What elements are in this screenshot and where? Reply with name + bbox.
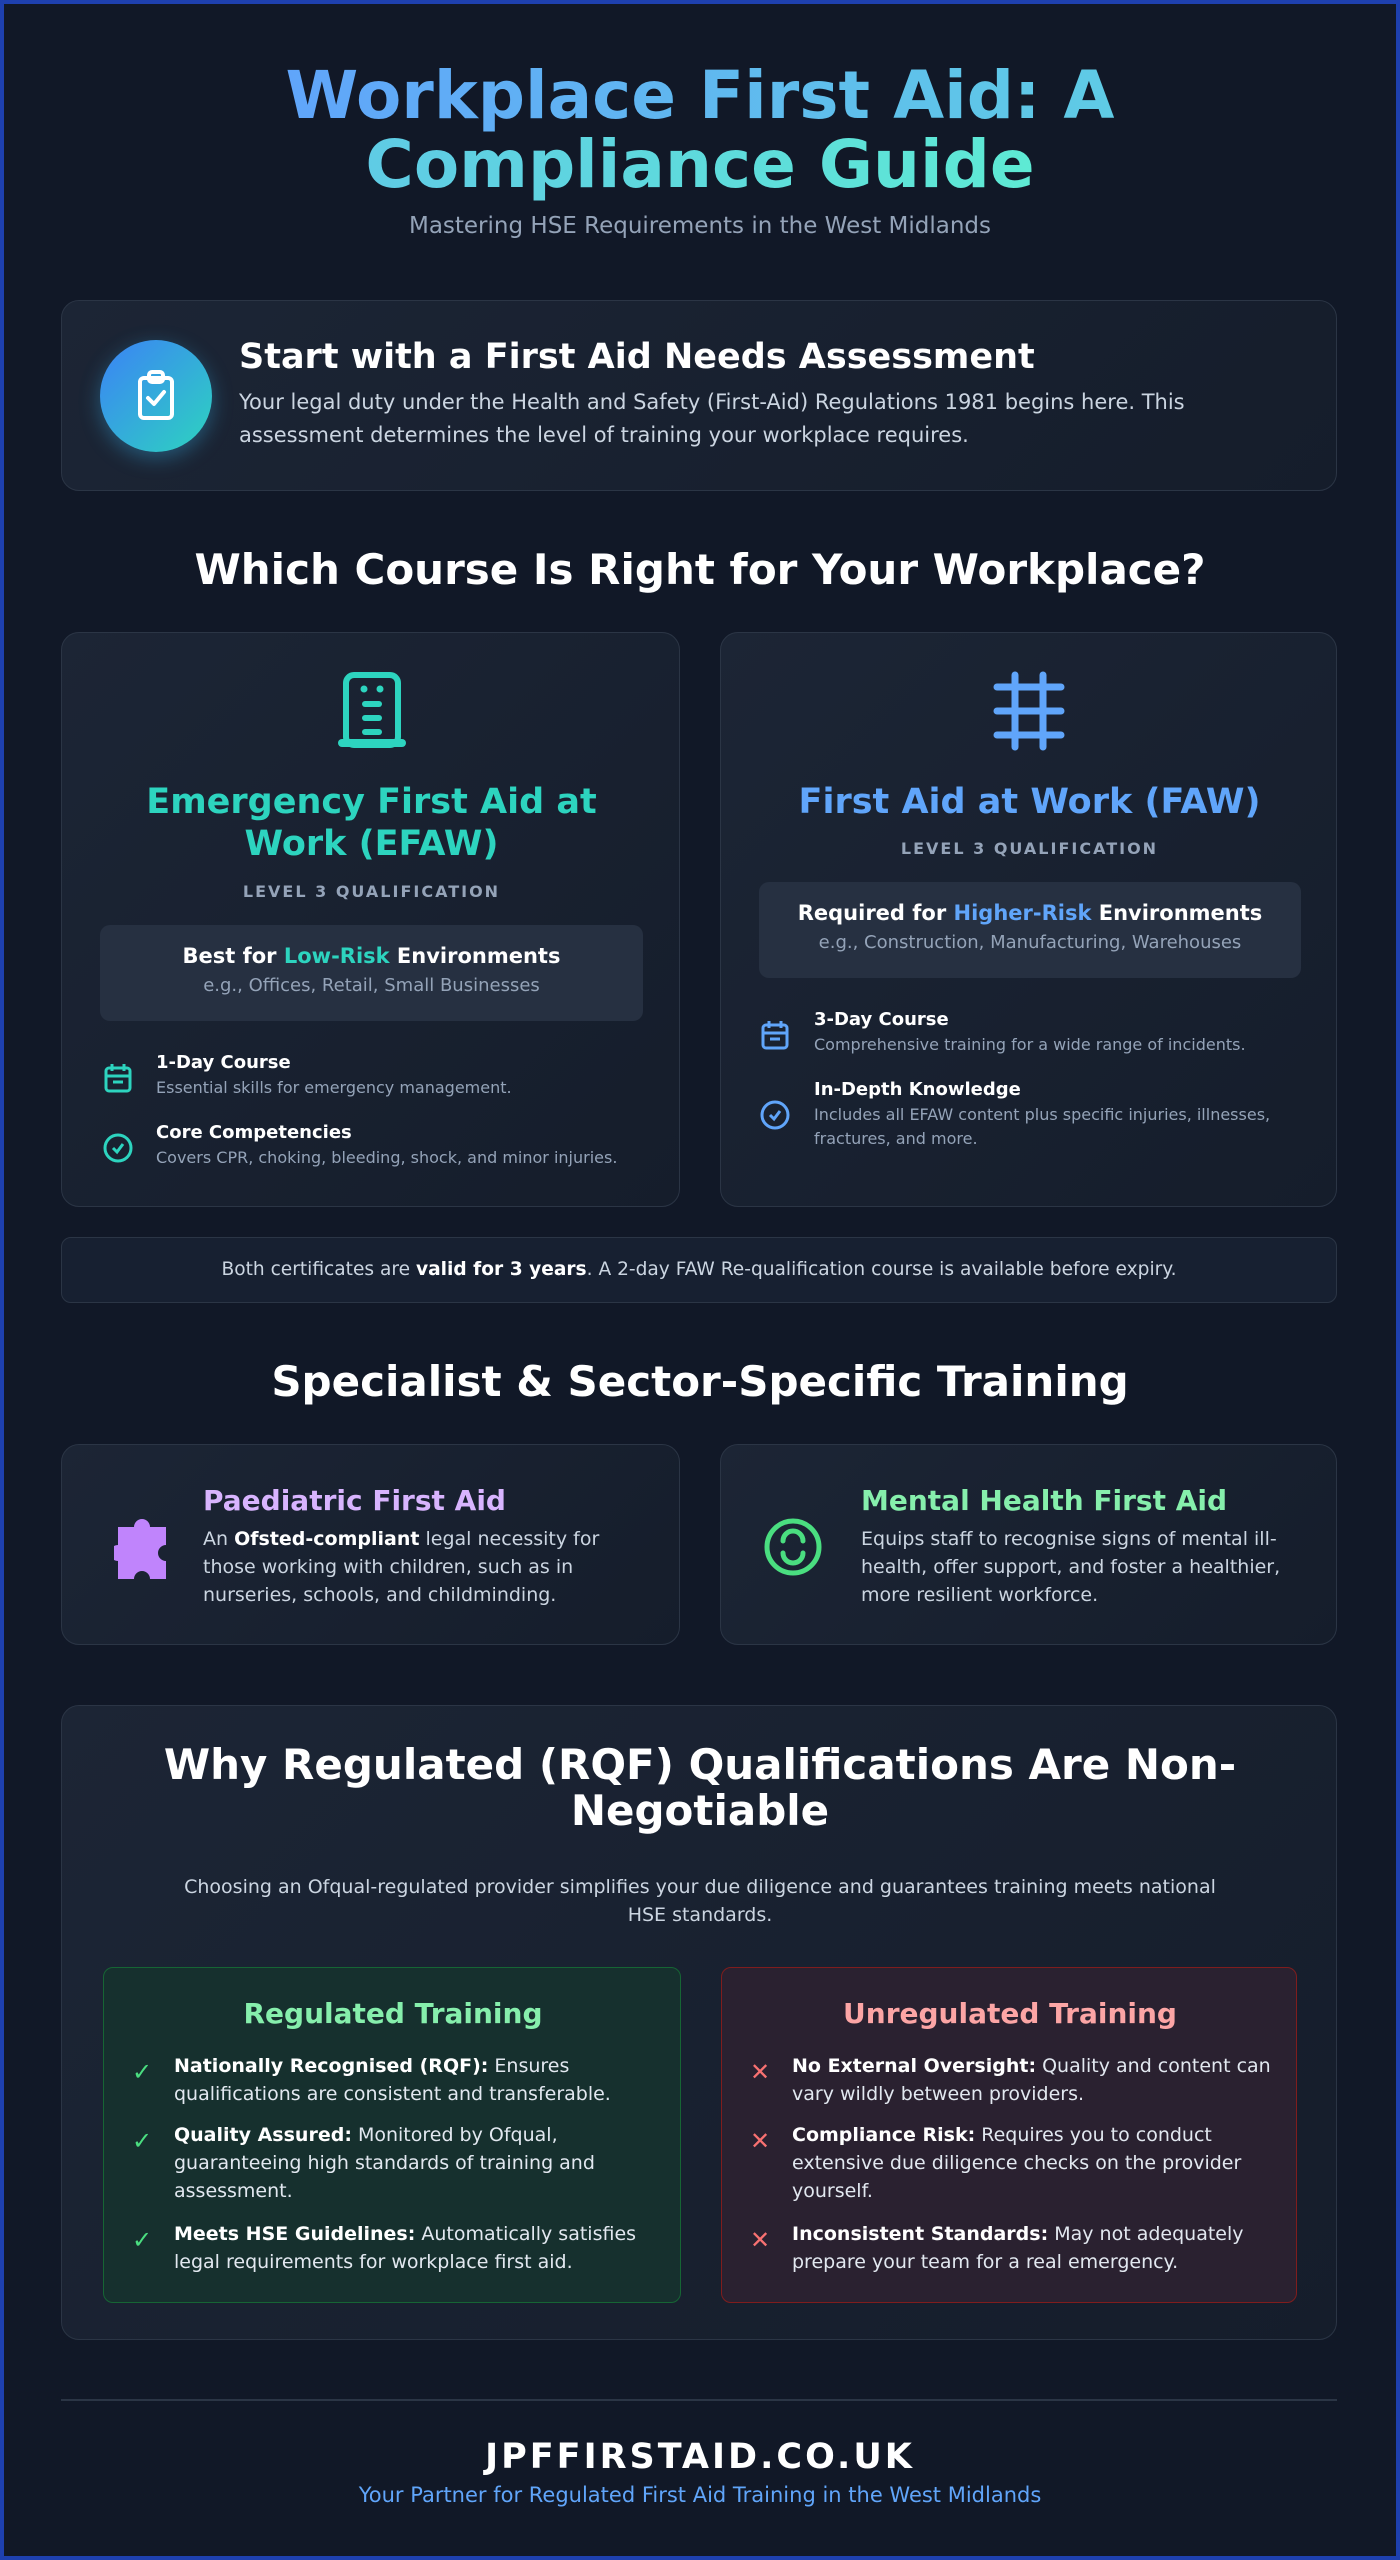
list item: No External Oversight: Quality and content can vary wildly between providers. bbox=[792, 2055, 1271, 2105]
icon: clipboard bbox=[100, 340, 212, 452]
panel: RQF bbox=[61, 1705, 1337, 2340]
heading: specialist: Specialist & Sector-Specific Training bbox=[271, 1357, 1129, 1406]
list item: Compliance Risk: Requires you to conduct extensive due diligence checks on the provider yourself. bbox=[792, 2124, 1241, 2202]
box: unregulated: ✕ bbox=[750, 2127, 770, 2155]
icon: smile bbox=[764, 1518, 822, 1576]
description: An Ofsted-compliant legal necessity for those working with children, such as in nurseries, schools, and childminding. bbox=[203, 1528, 599, 1606]
box: regulated: Regulated Training bbox=[243, 1997, 543, 2030]
panel: needs assessment bbox=[61, 300, 1337, 491]
feature: in-depth: In-Depth Knowledge bbox=[814, 1079, 1021, 1100]
panel: EFAW bbox=[61, 632, 680, 1207]
list item: Inconsistent Standards: May not adequately prepare your team for a real emergency. bbox=[792, 2223, 1244, 2273]
box: unregulated: Unregulated Training bbox=[843, 1997, 1177, 2030]
body text: Your legal duty under the Health and Safety (First-Aid) Regulations 1981 begins here. This assessment determines the level of training your workplace requires. bbox=[239, 390, 1185, 447]
feature: 1-day: Essential skills for emergency management. bbox=[156, 1078, 512, 1097]
subtitle: Mastering HSE Requirements in the West Midlands bbox=[409, 213, 991, 239]
title bbox=[286, 57, 1114, 203]
title: Workplace First Aid: A bbox=[286, 57, 1114, 134]
title: Paediatric First Aid bbox=[203, 1484, 506, 1517]
feature: 1-day bbox=[104, 1052, 512, 1097]
feature: in-depth: Includes all EFAW content plus specific injuries, illnesses, fractures, and more. bbox=[814, 1105, 1270, 1148]
box: regulated: ✓ bbox=[132, 2058, 152, 2086]
validity note bbox=[61, 1237, 1337, 1303]
footer tagline: Your Partner for Regulated First Aid Training in the West Midlands bbox=[359, 2483, 1041, 2507]
feature: 3-day: 3-Day Course bbox=[814, 1009, 949, 1030]
label: LEVEL 3 QUALIFICATION bbox=[901, 839, 1158, 858]
box: unregulated bbox=[721, 1967, 1297, 2303]
label: LEVEL 3 QUALIFICATION bbox=[243, 882, 500, 901]
box: regulated bbox=[103, 1967, 681, 2303]
intro text: Choosing an Ofqual-regulated provider simplifies your due diligence and guarantees training meets national HSE standards. bbox=[184, 1876, 1216, 1926]
title bbox=[146, 782, 597, 864]
icon: puzzle bbox=[114, 1519, 166, 1579]
description: Equips staff to recognise signs of mental ill-health, offer support, and foster a healthier, more resilient workforce. bbox=[861, 1528, 1280, 1606]
feature: in-depth bbox=[760, 1079, 1270, 1148]
list item: Meets HSE Guidelines: Automatically satisfies legal requirements for workplace first aid. bbox=[174, 2223, 636, 2273]
feature: core competencies: Core Competencies bbox=[156, 1122, 352, 1143]
suitability box: e.g., Offices, Retail, Small Businesses bbox=[203, 975, 540, 996]
feature: core competencies bbox=[104, 1122, 617, 1167]
suitability box bbox=[759, 882, 1301, 978]
list item: Quality Assured: Monitored by Ofqual, guaranteeing high standards of training and assessment. bbox=[174, 2124, 595, 2202]
validity note: Both certificates are valid for 3 years. A 2-day FAW Re-qualification course is available before expiry. bbox=[221, 1259, 1177, 1280]
panel: paediatric bbox=[61, 1444, 680, 1645]
suitability box bbox=[100, 925, 643, 1021]
box: unregulated: ✕ bbox=[750, 2058, 770, 2086]
feature: 3-day bbox=[762, 1009, 1246, 1054]
feature: 1-day: 1-Day Course bbox=[156, 1052, 291, 1073]
feature: 3-day: Comprehensive training for a wide range of incidents. bbox=[814, 1035, 1246, 1054]
title: Work (EFAW) bbox=[244, 824, 499, 864]
feature: core competencies: Covers CPR, choking, bleeding, shock, and minor injuries. bbox=[156, 1148, 617, 1167]
title: Compliance Guide bbox=[365, 126, 1035, 203]
panel: FAW bbox=[720, 632, 1337, 1207]
suitability box: Required for Higher-Risk Environments bbox=[798, 901, 1262, 925]
title: First Aid at Work (FAW) bbox=[799, 782, 1260, 822]
icon: scaffold bbox=[994, 672, 1064, 750]
box: regulated: ✓ bbox=[132, 2127, 152, 2155]
heading: which course: Which Course Is Right for Your Workplace? bbox=[194, 545, 1206, 594]
panel: mental health bbox=[720, 1444, 1337, 1645]
suitability box: e.g., Construction, Manufacturing, Warehouses bbox=[819, 932, 1241, 953]
icon: building bbox=[338, 672, 406, 748]
suitability box: Best for Low-Risk Environments bbox=[183, 944, 560, 968]
box: unregulated: ✕ bbox=[750, 2226, 770, 2254]
list item: Nationally Recognised (RQF): Ensures qualifications are consistent and transferable. bbox=[174, 2055, 611, 2105]
title: Emergency First Aid at bbox=[146, 782, 597, 822]
footer brand: JPFFIRSTAID.CO.UK bbox=[485, 2437, 915, 2477]
title: Mental Health First Aid bbox=[861, 1484, 1227, 1517]
heading: Start with a First Aid Needs Assessment bbox=[239, 337, 1035, 377]
box: regulated: ✓ bbox=[132, 2226, 152, 2254]
heading: Why Regulated (RQF) Qualifications Are Non-Negotiable bbox=[164, 1740, 1236, 1835]
